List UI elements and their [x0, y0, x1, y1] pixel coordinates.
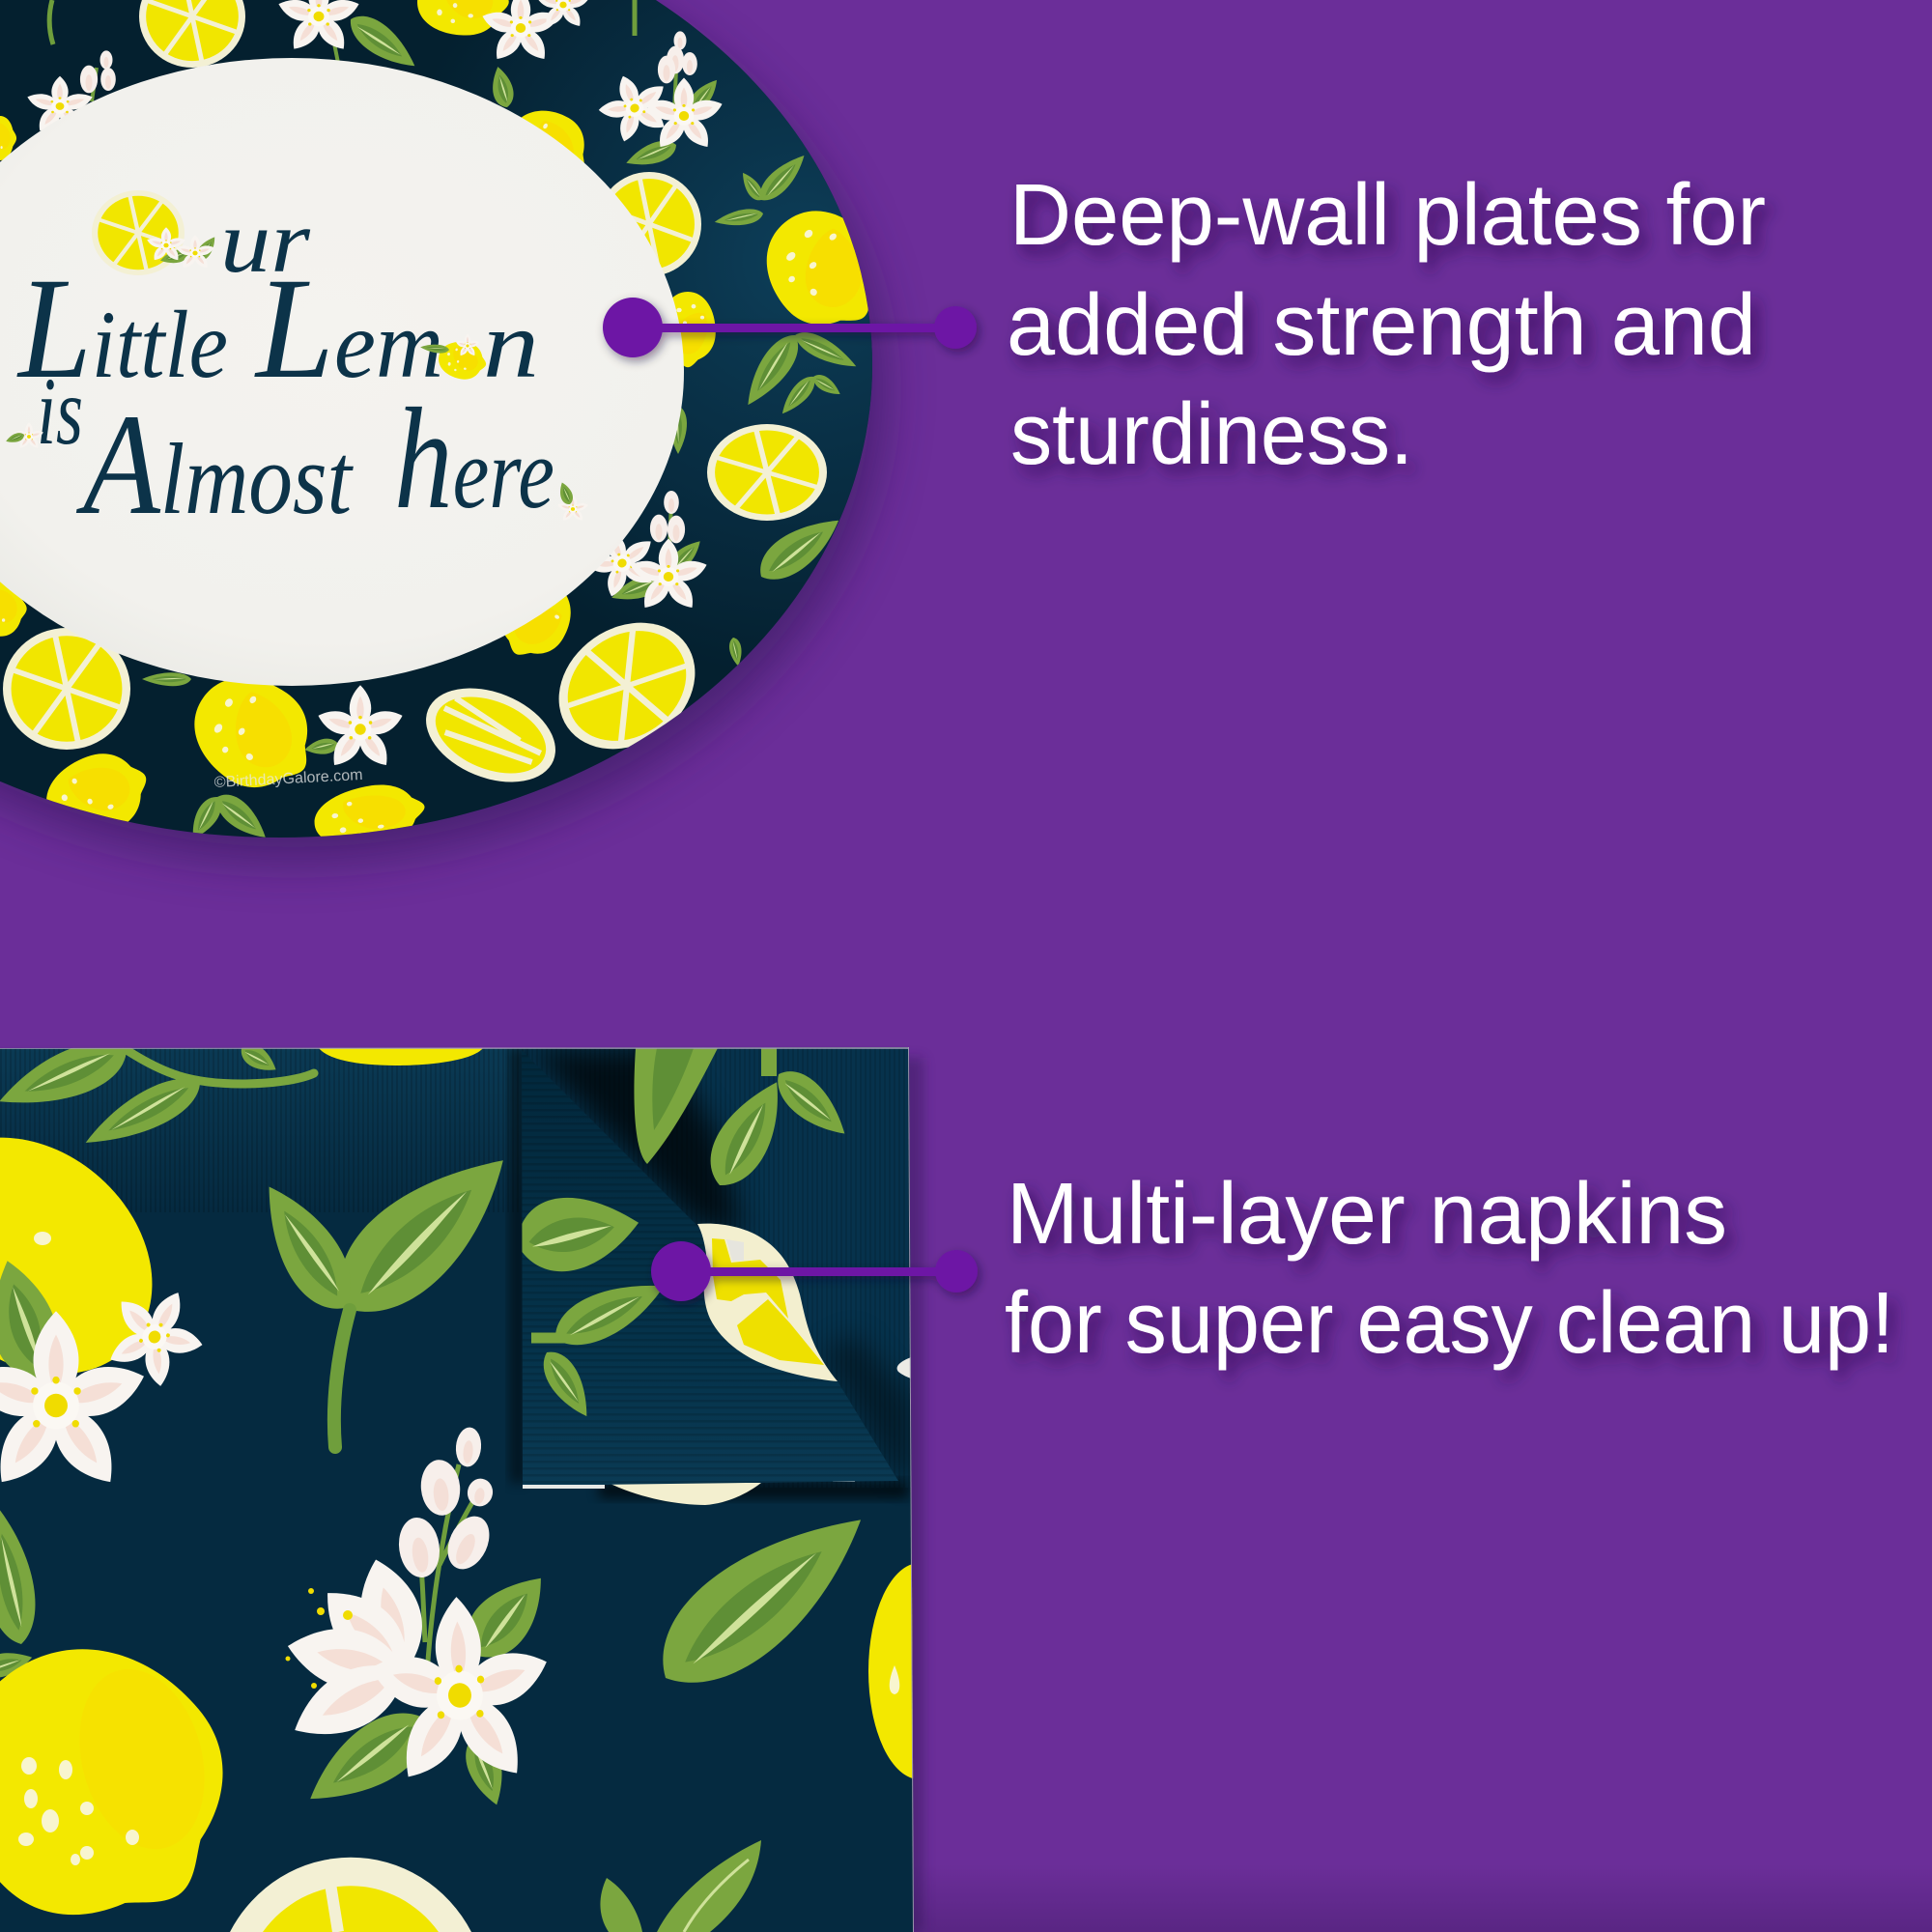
napkin bottom leaves [600, 1483, 889, 1932]
plate script message: is [37, 357, 83, 465]
napkin fold white edge [523, 1485, 605, 1489]
napkin shadow [0, 1058, 923, 1932]
text block: plates: added strength and [1007, 277, 1756, 374]
plate script message [16, 192, 554, 545]
rim whole lemons [0, 0, 905, 855]
napkin top leaves [0, 1047, 483, 1143]
right quadrant behind fold [525, 1048, 914, 1488]
plate shadow [0, 0, 886, 863]
napkin flowers top left [0, 1293, 203, 1482]
plate script message: n [483, 291, 539, 398]
napkin ribbed top [0, 1049, 525, 1146]
plate centre [0, 58, 684, 686]
text block: plates: Deep-wall plates for [1009, 167, 1766, 264]
plate script message: Almost [75, 384, 354, 545]
rim flowers [25, 0, 725, 772]
napkin fold flap [510, 1048, 908, 1488]
callout connector: napkin [651, 1241, 978, 1301]
text block: plates: sturdiness. [1010, 386, 1413, 483]
text block: napkins: for super easy clean up! [1005, 1275, 1894, 1372]
rim lemon slices [3, 0, 827, 775]
plate rim [0, 0, 872, 838]
icon: small flowers in script [5, 422, 589, 523]
napkin base [0, 1043, 918, 1932]
half lemon [426, 688, 555, 782]
napkin lemon right [868, 1565, 914, 1778]
napkin lemon on fold [697, 1224, 838, 1381]
plate script message: here [394, 379, 554, 539]
plate copyright: ©BirthdayGalore.com [213, 767, 363, 791]
text block: plates [1007, 167, 1766, 483]
plate script message: Little [16, 248, 228, 409]
fold shadow [510, 1048, 914, 1498]
napkin left leaves [0, 1511, 35, 1677]
plate [0, 0, 905, 855]
napkin lemon slice bottom [230, 1858, 471, 1932]
napkin centre flowers [281, 1427, 560, 1824]
napkin big leaf sprig [269, 1160, 503, 1454]
callout connector: plate [603, 298, 977, 357]
rim leaves [49, 0, 861, 846]
icon: small lemon in script [420, 334, 489, 383]
lemon sliver below fold [609, 1483, 761, 1505]
icon: printed lemon slice on plate [92, 190, 219, 275]
napkin big lemon bottom left [0, 1649, 223, 1915]
napkin small petals right [833, 1356, 914, 1482]
flap leaves [522, 1198, 660, 1416]
napkin right edge [909, 1047, 914, 1932]
napkin top right leaves [634, 1049, 844, 1185]
napkin lemon top left [0, 1138, 153, 1378]
plate script message: Lem [254, 248, 443, 409]
text block: napkins: Multi-layer napkins [1007, 1166, 1727, 1263]
plate script message: ur [220, 192, 311, 291]
rim pattern [0, 0, 905, 855]
text block: napkins [1005, 1166, 1894, 1372]
napkin [0, 1030, 971, 1932]
